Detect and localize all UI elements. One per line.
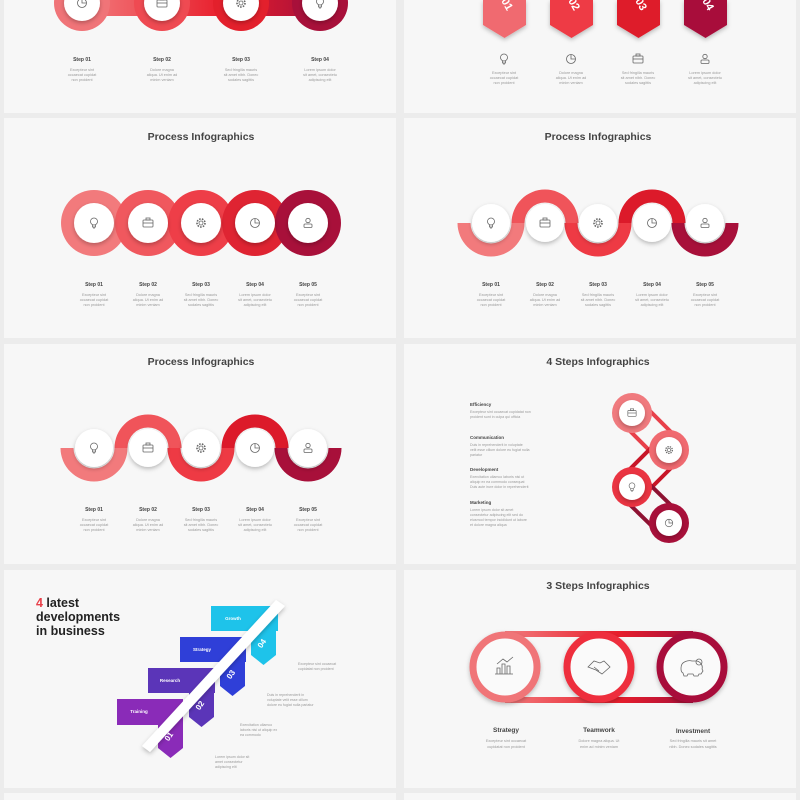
text: step labels: non proident [480,303,502,307]
text: step labels: Step 03 [232,57,250,63]
text: step labels: Step 02 [153,57,171,63]
chart: staircase bars and tags: Research [160,678,180,683]
chart: staircase bars and tags: Strategy [193,647,211,652]
text: step labels: Dolore magna aliqua. Ut [579,739,620,743]
text: step labels: non proident [83,528,105,532]
text: step labels: Step 04 [246,507,264,513]
text: step labels [486,727,717,749]
text: step labels: Sed fringilla mauris sit amet [670,739,717,743]
title: in business [36,624,105,638]
chart: staircase bars and tags [117,600,285,758]
text: step labels: Sed fringilla mauris [225,68,257,72]
text: step labels: Excepteur sint [479,293,504,297]
chart: tag arrows [483,0,727,38]
text: step labels: Dolore magna [136,293,161,297]
text: step labels: Step 03 [192,507,210,513]
text: step labels: sit amet, consectetu [238,523,272,527]
text: descriptions: ea commodo [240,733,261,737]
text: step labels: sit amet nibh. Donec [581,298,615,302]
text: left list: velit esse cillum dolore eu fugiat nulla [470,448,530,452]
text: tag descriptions: Excepteur sint [492,71,517,75]
text: step labels: Lorem ipsum dolor [239,518,271,522]
text: descriptions: Excepteur sint occaecat [298,662,336,666]
text: left list: Exercitation ullamco laboris nisi ut [470,475,524,479]
text: step labels: Excepteur sint [82,518,107,522]
text: tag descriptions: Lorem ipsum dolor [689,71,721,75]
chart: staircase bars and tags: 03 [225,668,238,681]
text: step labels: sit amet, consectetu [635,298,669,302]
text: tag descriptions: minim veniam [559,81,583,85]
text: step labels [477,282,720,307]
panel: top-right slide [404,0,796,113]
text: step labels: occaecat cupidat [691,298,720,302]
text: step labels: Sed fringilla mauris [185,293,217,297]
text: left list: Efficiency [470,402,492,407]
text: step labels: Dolore magna [150,68,175,72]
text: step labels: adipiscing elit [244,528,267,532]
text: step labels: sodales sagittis [585,303,611,307]
text: step labels: Lorem ipsum dolor [239,293,271,297]
panel: 4 steps infographics [404,344,796,564]
text: step labels: Step 02 [139,507,157,513]
text: step labels: minim veniam [533,303,557,307]
chart: wave band [458,190,738,256]
text: step labels: cupidatat non proident [487,745,526,749]
text: step labels: sit amet, consectetu [303,73,337,77]
text: descriptions: adipiscing elit [215,765,237,769]
chart: ring chain [473,631,724,703]
text: step labels: sodales sagittis [188,528,214,532]
panel: wave process right [404,118,796,338]
text: step labels: Dolore magna [136,518,161,522]
text: step labels: adipiscing elit [244,303,267,307]
text: step labels: occaecat cupidat [294,298,323,302]
text: step labels: Excepteur sint [693,293,718,297]
text: step labels: aliqua. Ut enim ad [530,298,560,302]
text: tag descriptions: sit amet, consectetu [688,76,722,80]
text: step labels: minim veniam [136,528,160,532]
text: step labels: Step 03 [589,282,607,288]
text: step labels: aliqua. Ut enim ad [133,298,163,302]
text: step labels: occaecat cupidat [80,298,109,302]
text: step labels: Sed fringilla mauris [582,293,614,297]
text: step labels: Step 05 [299,507,317,513]
text: left list: Duis in reprehenderit in voluptate [470,443,523,447]
text: step labels: Lorem ipsum dolor [304,68,336,72]
text: step labels [80,282,323,307]
text: tag descriptions: Sed fringilla mauris [622,71,654,75]
text: left list: consectetur adipiscing elit sed do [470,513,523,517]
text: tag descriptions: adipiscing elit [694,81,717,85]
chart: staircase bars and tags: 02 [194,699,207,712]
text: step labels: aliqua. Ut enim ad [133,523,163,527]
text: descriptions: Duis in reprehenderit in [267,693,304,697]
text: step labels: nibh. Donec sodales sagittis [669,745,717,749]
text: step labels: sodales sagittis [228,78,254,82]
text: step labels: Excepteur sint [296,518,321,522]
text: left list: et dolore magna aliqua [470,523,507,527]
text: step labels: Step 01 [73,57,91,63]
text: descriptions: voluptate velit esse cillum [267,698,308,702]
text: tag descriptions: non proident [493,81,515,85]
icons: tag icons [500,54,709,64]
text: descriptions: laboris nisi ut aliquip ex [240,728,277,732]
chart: 4-step circle band [54,0,348,31]
text: step labels: adipiscing elit [309,78,332,82]
text: step labels: Step 01 [85,507,103,513]
text: step labels: sodales sagittis [188,303,214,307]
text: left list: aliquip ex ea commodo consequat [470,480,525,484]
text: left list [470,402,531,527]
title: Process Infographics [545,131,652,143]
text: descriptions: amet consectetur [215,760,243,764]
text: tag descriptions: occaecat cupidat [490,76,519,80]
chart: staircase bars and tags: 04 [256,637,269,650]
text: step labels: aliqua. Ut enim ad [147,73,177,77]
text: step labels: Step 05 [696,282,714,288]
text: descriptions: Lorem ipsum dolor sit [215,755,249,759]
text: step labels: Excepteur sint [70,68,95,72]
text: tag descriptions [490,71,722,85]
text: left list: Development [470,467,499,472]
text: step labels: adipiscing elit [641,303,664,307]
chart: wave band [60,414,342,481]
title: developments [36,610,120,624]
panel: 3 steps infographics [404,570,796,788]
text: descriptions [215,662,336,769]
text: left list: Communication [470,435,504,440]
text: step labels: Dolore magna [533,293,558,297]
text: descriptions: Exercitation ullamco [240,723,272,727]
text: tag descriptions: aliqua. Ut enim ad [556,76,586,80]
chart: staircase bars and tags: 01 [163,730,176,743]
text: step labels: occaecat cupidat [294,523,323,527]
text: left list: proident sunt in culpa qui officia [470,415,520,419]
text: step labels: Excepteur sint occaecat [486,739,527,743]
chart: staircase bars and tags: Growth [225,616,241,621]
text: left list: Duis aute irure dolor in reprehenderit [470,485,529,489]
text: step labels: non proident [694,303,716,307]
text: step labels: minim veniam [136,303,160,307]
panel: wave process left [4,344,396,564]
text: step labels: Step 01 [482,282,500,288]
title: Process Infographics [148,356,255,368]
text: step labels: Step 04 [246,282,264,288]
text: step labels: Strategy [493,727,519,734]
text: tag descriptions: Dolore magna [559,71,584,75]
title: 4 latest [36,596,80,610]
text: left list: Lorem ipsum dolor sit amet [470,508,513,512]
text: step labels: non proident [297,528,319,532]
panel: 4 latest developments [4,570,396,788]
title: Process Infographics [148,131,255,143]
panel: top-left slide [4,0,396,113]
text: step labels: non proident [297,303,319,307]
text: step labels [68,57,337,82]
text: step labels: Step 02 [536,282,554,288]
text: step labels: Step 02 [139,282,157,288]
text: step labels: sit amet nibh. Donec [184,298,218,302]
text: step labels: Step 03 [192,282,210,288]
text: step labels: occaecat cupidat [68,73,97,77]
text: step labels: enim ad minim veniam [580,745,618,749]
title: 3 Steps Infographics [546,580,650,592]
text: step labels: Step 01 [85,282,103,288]
text: step labels: Sed fringilla mauris [185,518,217,522]
chart: staircase bars and tags: Training [130,709,148,714]
text: step labels: sit amet nibh. Donec [184,523,218,527]
text: step labels: sit amet nibh. Donec [224,73,258,77]
text: step labels: Excepteur sint [296,293,321,297]
text: step labels [80,507,323,532]
text: step labels: Step 05 [299,282,317,288]
text: left list: pariatur [470,453,483,457]
text: descriptions: cupidatat non proident [298,667,334,671]
panel: overlapping circles process [4,118,396,338]
text: step labels: non proident [83,303,105,307]
text: tag descriptions: sit amet nibh. Donec [621,76,655,80]
text: left list: Excepteur sint occaecat cupidatat non [470,410,531,414]
panel: bottom strip [4,793,796,800]
text: step labels: Step 04 [643,282,661,288]
text: step labels: Lorem ipsum dolor [636,293,668,297]
title: 4 Steps Infographics [546,356,650,368]
text: step labels: occaecat cupidat [477,298,506,302]
text: step labels: Teamwork [583,727,615,734]
text: left list: Marketing [470,500,492,505]
chart: zigzag circles [612,393,689,543]
chart: overlapping circles [61,190,341,256]
title [36,596,120,638]
text: descriptions: dolore eu fugiat nulla pariatur [267,703,314,707]
text: tag descriptions: sodales sagittis [625,81,651,85]
text: step labels: sit amet, consectetu [238,298,272,302]
text: step labels: Investment [676,728,711,735]
text: tag numbers [498,0,716,14]
text: step labels: Step 04 [311,57,329,63]
text: step labels: occaecat cupidat [80,523,109,527]
text: step labels: minim veniam [150,78,174,82]
text: step labels: Excepteur sint [82,293,107,297]
text: left list: eiusmod tempor incididunt ut labore [470,518,527,522]
text: step labels: non proident [71,78,93,82]
